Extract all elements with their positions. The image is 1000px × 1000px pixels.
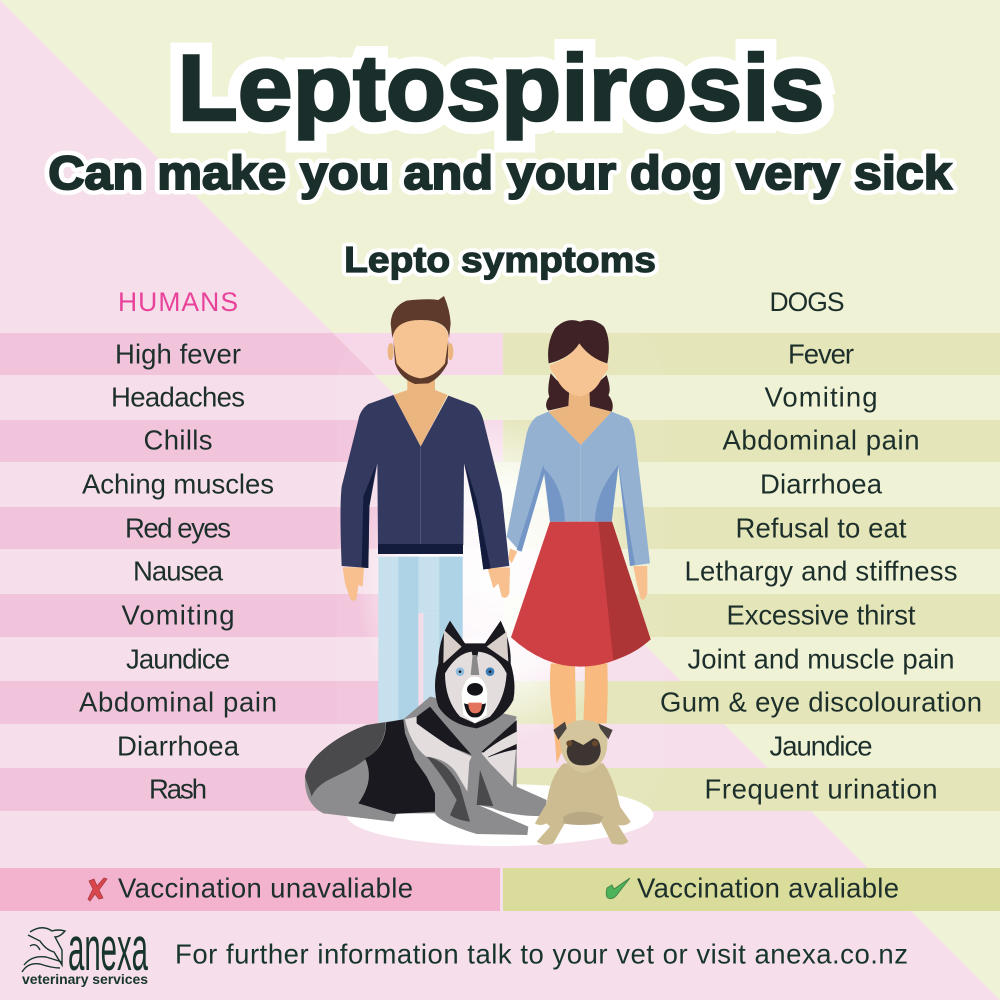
tagline: veterinary services bbox=[22, 971, 148, 987]
text block: human symptoms: Headaches bbox=[111, 382, 245, 412]
text block: dog symptoms: Gum & eye discolouration bbox=[660, 686, 982, 718]
text block: dog symptoms: Excessive thirst bbox=[726, 600, 916, 630]
text block: human symptoms: Diarrhoea bbox=[117, 730, 240, 762]
illustration: husky bbox=[305, 621, 547, 835]
text block: human symptoms: Nausea bbox=[133, 556, 224, 586]
text block: human symptoms: Rash bbox=[149, 774, 207, 804]
text block: human symptoms: Aching muscles bbox=[82, 468, 274, 500]
text block: human symptoms: High fever bbox=[115, 338, 241, 370]
heading: humans: HUMANS bbox=[118, 287, 238, 317]
soft glow behind the people bbox=[337, 316, 665, 821]
icon: red cross bbox=[88, 878, 107, 901]
text block: human symptoms: Abdominal pain bbox=[79, 686, 277, 718]
title: Leptospirosis bbox=[177, 36, 825, 140]
text: vaccination available: Vaccination avaliable bbox=[637, 872, 899, 904]
text block: dog symptoms: Refusal to eat bbox=[736, 512, 907, 544]
illustration: man bbox=[340, 296, 510, 727]
illustration: woman bbox=[507, 320, 651, 763]
text block: dog symptoms: Frequent urination bbox=[704, 774, 938, 804]
infographic canvas: anexa bbox=[68, 915, 148, 984]
text block: dog symptoms: Diarrhoea bbox=[760, 468, 883, 500]
text block: human symptoms: Vomiting bbox=[122, 600, 234, 630]
panel: humans symptom strips bbox=[0, 333, 503, 811]
text block: dog symptoms: Vomiting bbox=[764, 382, 878, 412]
panel: dogs symptom strips bbox=[503, 333, 1000, 811]
title fill weight: Leptospirosis bbox=[177, 36, 825, 140]
text block: human symptoms bbox=[79, 338, 277, 804]
text block: dog symptoms: Joint and muscle pain bbox=[688, 644, 954, 674]
panel: vaccination unavailable bbox=[0, 868, 500, 911]
text block: dog symptoms bbox=[660, 338, 982, 804]
text block: human symptoms: Jaundice bbox=[126, 644, 230, 674]
text: vaccination unavailable: Vaccination unavaliable bbox=[118, 872, 413, 904]
icon: green check bbox=[606, 878, 630, 899]
footer text: For further information talk to your vet or visit anexa.co.nz bbox=[175, 938, 908, 970]
heading: dogs: DOGS bbox=[770, 287, 844, 317]
text block: dog symptoms: Abdominal pain bbox=[722, 424, 920, 456]
subtitle: Can make you and your dog very sick bbox=[48, 148, 953, 200]
text block: human symptoms: Chills bbox=[144, 424, 212, 456]
panel: vaccination available bbox=[503, 868, 1000, 911]
text block: human symptoms: Red eyes bbox=[125, 512, 231, 544]
illustration: white ground ellipse bbox=[346, 784, 654, 846]
logo: anexa veterinary services bbox=[22, 915, 148, 987]
text block: dog symptoms: Lethargy and stiffness bbox=[684, 556, 958, 586]
text block: dog symptoms: Jaundice bbox=[770, 730, 872, 762]
illustration: pug bbox=[535, 720, 631, 845]
subtitle fill weight: Can make you and your dog very sick bbox=[48, 148, 953, 200]
heading: lepto symptoms: Lepto symptoms bbox=[344, 239, 656, 280]
icon: cow and waves bbox=[22, 928, 65, 972]
text block: dog symptoms: Fever bbox=[788, 338, 854, 370]
heading fill weight: Lepto symptoms bbox=[344, 239, 656, 280]
